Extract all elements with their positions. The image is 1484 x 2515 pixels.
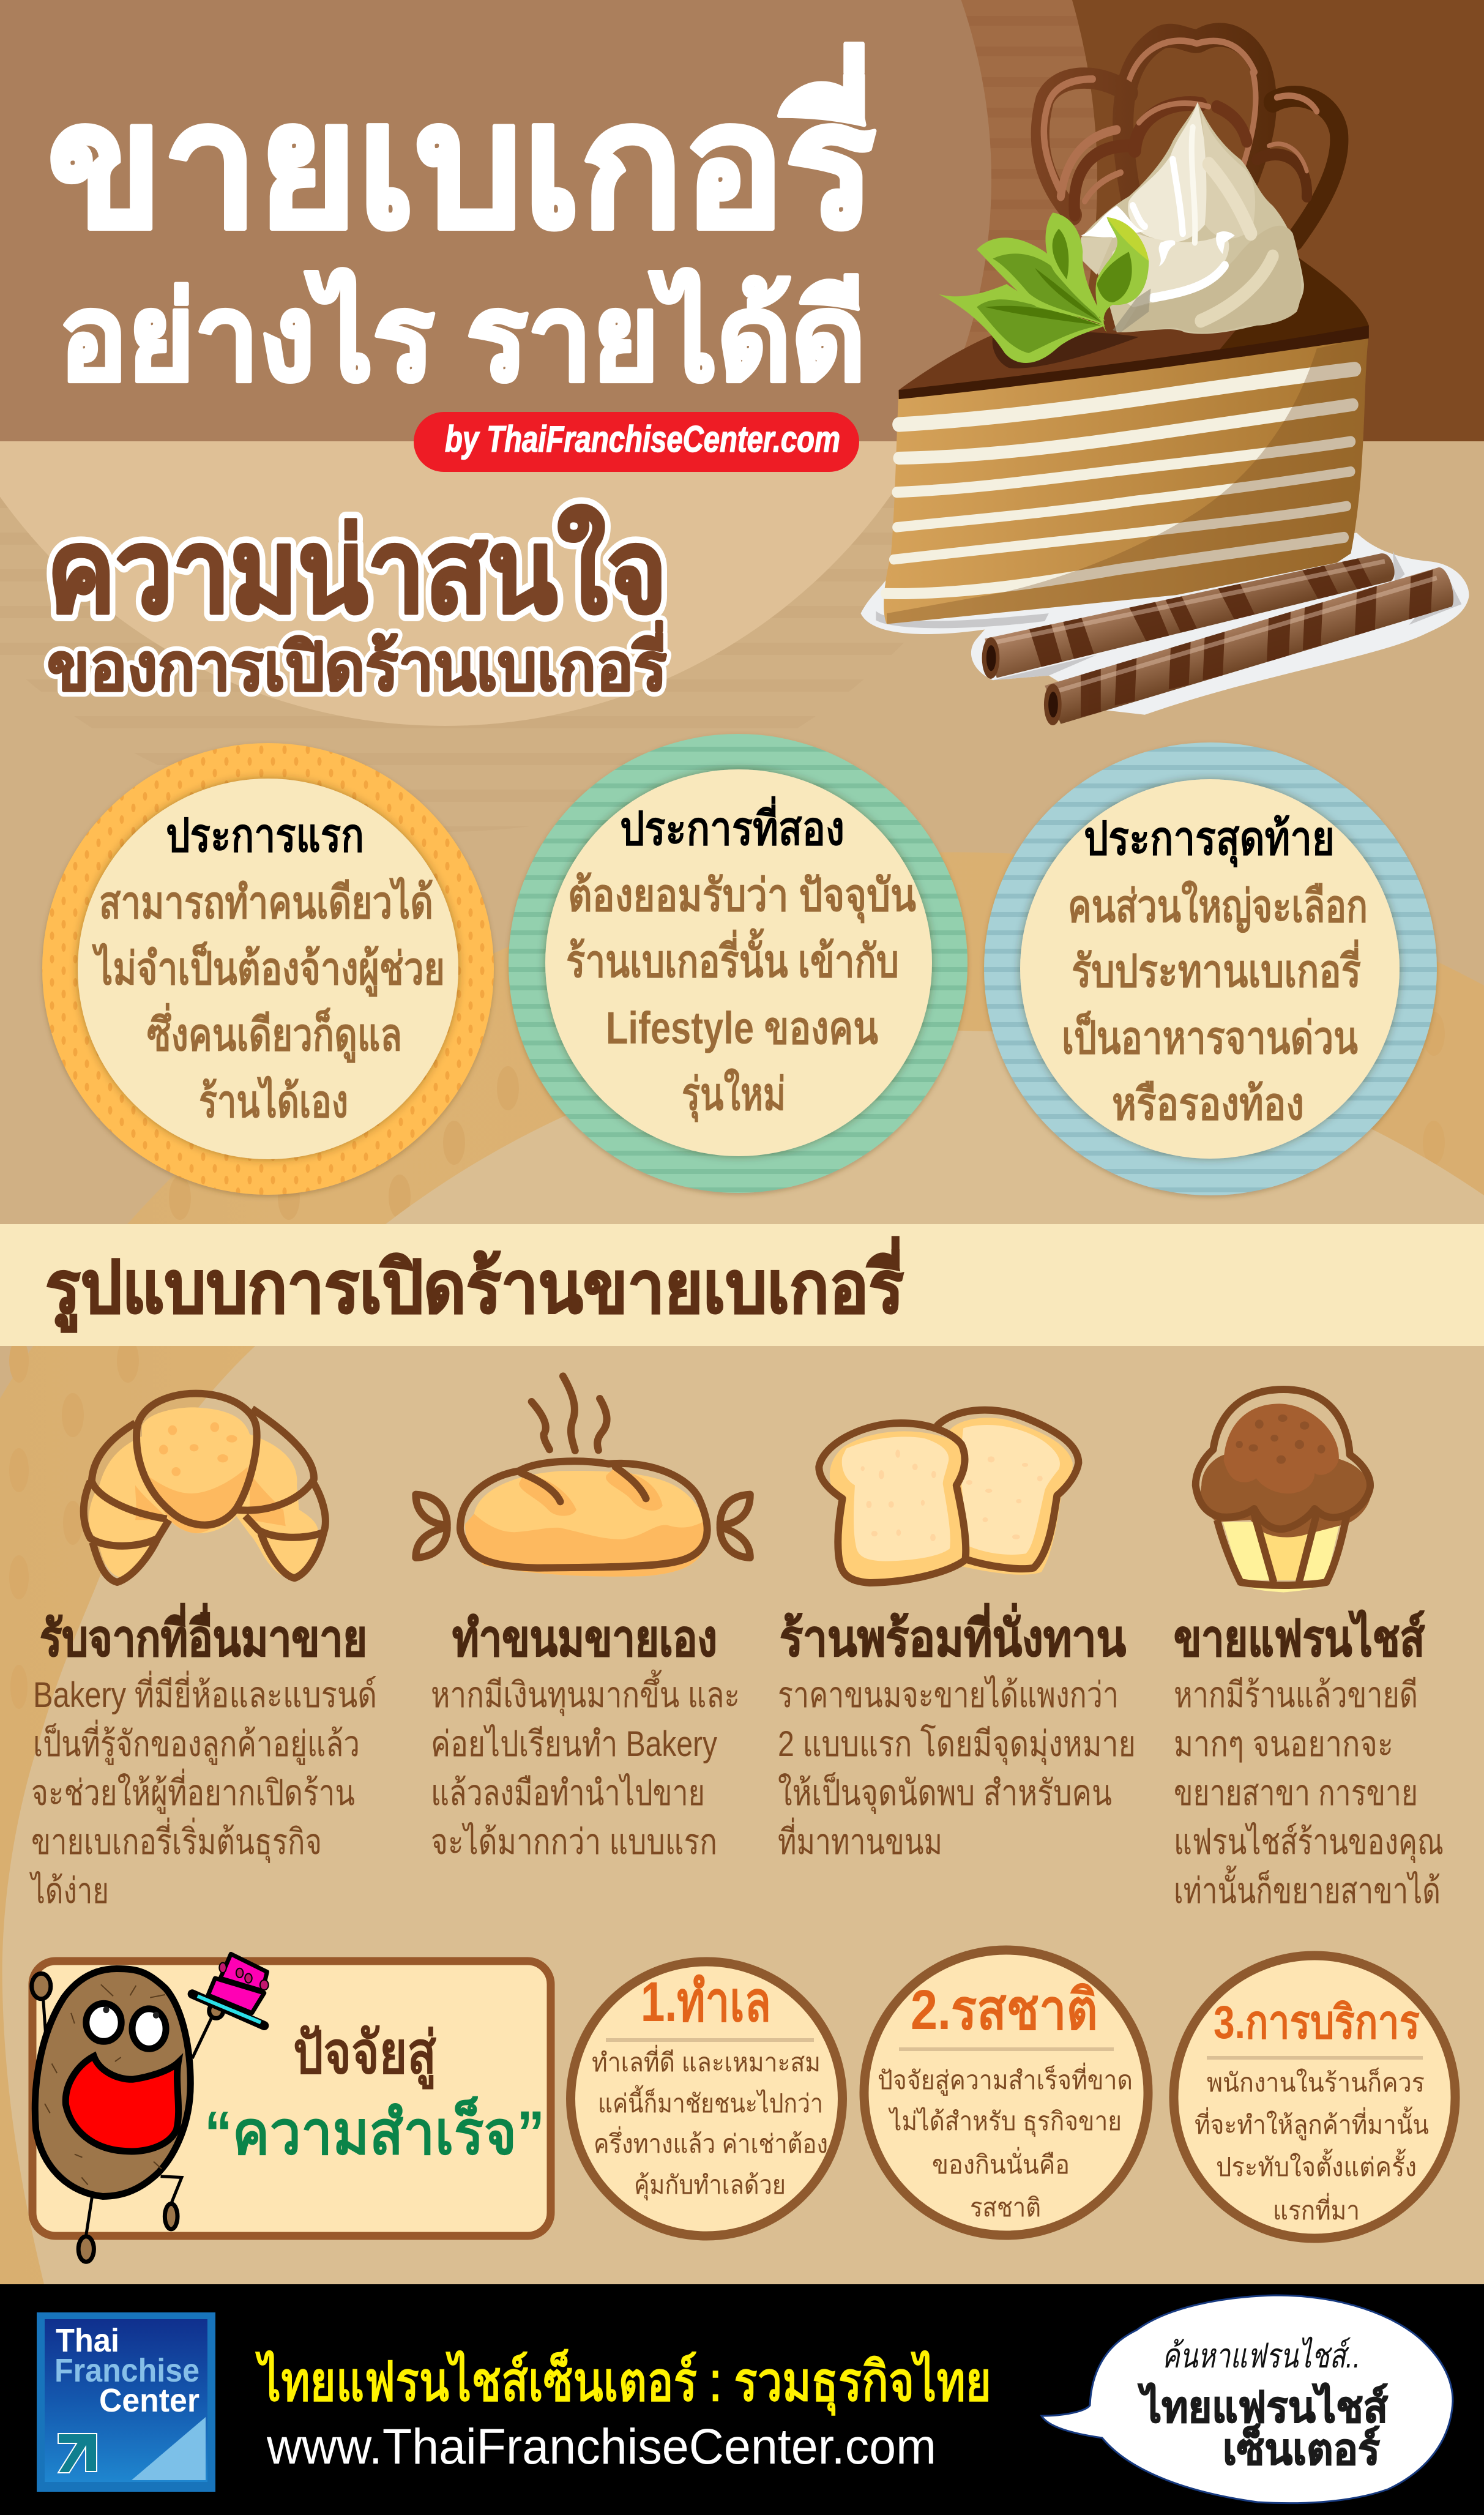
panel: factor 2 taste: [864, 1950, 1148, 2235]
panel: first reason: ซึ่งคนเดียวก็ดูแล: [147, 1003, 402, 1063]
title: [47, 43, 876, 405]
icon: chocolate cupcake: [1196, 1389, 1371, 1593]
logo: Thai Franchise Center: Franchise: [54, 2352, 199, 2389]
icon: baked bread with steam: [416, 1376, 750, 1577]
red byline pill: by ThaiFranchiseCenter.com: [445, 419, 840, 460]
column: buy and resell: รับจากที่อื่นมาขาย: [40, 1603, 367, 1667]
logo: Thai Franchise Center: [37, 2312, 215, 2492]
column: shop with seating: [778, 1603, 1136, 1862]
column: shop with seating: ที่มาทานขนม: [778, 1817, 942, 1862]
logo: Thai Franchise Center: Center: [99, 2382, 199, 2419]
panel: factor 2 taste: ไม่ได้สำหรับ ธุรกิจขาย: [888, 2107, 1122, 2137]
icon: logo arrow: [58, 2434, 97, 2473]
footer website address: www.ThaiFranchiseCenter.com: [266, 2419, 936, 2475]
title: ขายเบเกอรี่: [47, 43, 876, 263]
panel: factor 1 location: ครึ่งทางแล้ว ค่าเช่าต้อง: [594, 2126, 828, 2158]
heading: appeal of opening a bakery: ความน่าสนใจ: [47, 505, 667, 637]
column: franchise: [1174, 1610, 1444, 1911]
cream layers: [886, 369, 1355, 594]
red byline pill: [414, 412, 859, 472]
panel: factor 2 taste: 2.รสชาติ: [911, 1979, 1098, 2041]
panel: success factors box: [32, 1961, 551, 2236]
wafer roll openings: [982, 637, 999, 679]
panel: factor 1 location: [570, 1962, 842, 2236]
panel: factor 2 taste: ปัจจัยสู่ความสำเร็จที่ขาด: [878, 2063, 1133, 2096]
panel: final reason: คนส่วนใหญ่จะเลือก: [1068, 880, 1368, 933]
column: bake your own: ค่อยไปเรียนทำ Bakery: [431, 1724, 717, 1764]
footer slogan: ไทยแฟรนไชส์เซ็นเตอร์ : รวมธุรกิจไทย: [256, 2349, 991, 2415]
panel: first reason: ร้านได้เอง: [199, 1075, 348, 1127]
speech bubble: ไทยแฟรนไชส์: [1137, 2382, 1388, 2431]
panel: second reason: ร้านเบเกอรี่นั้น เข้ากับ: [566, 928, 899, 987]
panel: factor 3 service: แรกที่มา: [1273, 2193, 1360, 2225]
column: bake your own: หากมีเงินทุนมากขึ้น และ: [431, 1670, 740, 1717]
panel: first reason: สามารถทำคนเดียวได้: [99, 876, 433, 928]
panel: factor 3 service: 3.การบริการ: [1214, 1997, 1420, 2049]
column: shop with seating: ราคาขนมจะขายได้แพงกว่า: [778, 1675, 1119, 1715]
heading: appeal of opening a bakery: ของการเปิดร้านเบเกอรี่: [47, 621, 667, 704]
heading: appeal of opening a bakery: ของการเปิดร้านเบเกอรี่: [47, 621, 667, 704]
panel: factor 3 service: ประทับใจตั้งแต่ครั้ง: [1216, 2148, 1417, 2181]
icon: potato mascot holding cake: [32, 1954, 269, 2262]
column: franchise: หากมีร้านแล้วขายดี: [1174, 1675, 1418, 1715]
column: buy and resell: จะช่วยให้ผู้ที่อยากเปิดร้าน: [31, 1768, 355, 1814]
panel: final reason: หรือรองท้อง: [1112, 1078, 1304, 1129]
column: buy and resell: ได้ง่าย: [29, 1870, 109, 1911]
column: shop with seating: ร้านพร้อมที่นั่งทาน: [780, 1603, 1126, 1667]
panel: final reason: เป็นอาหารจานด่วน: [1062, 1011, 1358, 1063]
shaded side: [887, 337, 1369, 624]
whipped cream: [1081, 102, 1304, 334]
column: buy and resell: ขายเบเกอรี่เริ่มต้นธุรกิจ: [31, 1817, 322, 1864]
panel: second reason: รุ่นใหม่: [682, 1067, 786, 1123]
panel: factor 1 location: 1.ทำเล: [641, 1971, 771, 2033]
section banner: bakery formats: [0, 1224, 1484, 1346]
panel: final reason: ประการสุดท้าย: [1084, 813, 1335, 868]
speech bubble: [1042, 2295, 1453, 2503]
chocolate hearts: [1040, 35, 1339, 241]
panel: factor 3 service: [1174, 1956, 1455, 2238]
panel: second reason: [509, 734, 968, 1193]
icon: sliced toast: [819, 1410, 1078, 1583]
column: franchise: ขยายสาขา การขาย: [1174, 1773, 1418, 1813]
panel: factor 2 taste: ของกินนั่นคือ: [932, 2147, 1070, 2179]
panel: first reason: ไม่จำเป็นต้องจ้างผู้ช่วย: [91, 942, 445, 997]
title: อย่างไร รายได้ดี: [59, 268, 866, 405]
illustration: layered chocolate cake: [861, 35, 1469, 731]
column: franchise: มากๆ จนอยากจะ: [1174, 1724, 1393, 1764]
panel: success factors box: ปัจจัยสู่: [293, 2020, 436, 2090]
panel: factor 1 location: คุ้มกับทำเลด้วย: [634, 2170, 786, 2201]
section banner: bakery formats: รูปแบบการเปิดร้านขายเบเกอรี่: [45, 1237, 904, 1332]
panel: second reason: ต้องยอมรับว่า ปัจจุบัน: [568, 870, 916, 924]
column: buy and resell: เป็นที่รู้จักของลูกค้าอยู่แล้ว: [33, 1719, 360, 1765]
panel: final reason: [984, 742, 1437, 1195]
panel: first reason: ประการแรก: [166, 810, 364, 862]
column: franchise: ขายแฟรนไชส์: [1174, 1610, 1425, 1667]
column: bake your own: ทำขนมขายเอง: [452, 1611, 717, 1667]
cake on plate: [192, 1954, 269, 2025]
heading: appeal of opening a bakery: ความน่าสนใจ: [47, 505, 667, 637]
panel: factor 1 location: ทำเลที่ดี และเหมาะสม: [592, 2045, 821, 2077]
column: bake your own: แล้วลงมือทำนำไปขาย: [431, 1773, 705, 1813]
chocolate top: [899, 256, 1369, 398]
logo: Thai Franchise Center: Thai: [56, 2322, 119, 2359]
panel: factor 1 location: แค่นี้ก็มาชัยชนะไปกว่า: [598, 2085, 823, 2118]
wafer roll back: [985, 553, 1395, 678]
panel: success factors box: “ความสำเร็จ”: [204, 2096, 545, 2167]
panel: final reason: รับประทานเบเกอรี่: [1072, 939, 1361, 996]
speech bubble: เซ็นเตอร์: [1223, 2423, 1380, 2473]
footer band: [0, 2284, 1484, 2515]
column: shop with seating: 2 แบบแรก โดยมีจุดมุ่งหมาย: [778, 1724, 1136, 1766]
column: bake your own: [431, 1611, 740, 1862]
column: shop with seating: ให้เป็นจุดนัดพบ สำหรับคน: [778, 1772, 1112, 1815]
heading: appeal of opening a bakery: [47, 505, 667, 704]
icon: croissant: [84, 1394, 326, 1582]
plate shadows: [876, 551, 1461, 680]
background: orange bread ring: [0, 852, 1484, 2284]
panel: factor 2 taste: รสชาติ: [970, 2193, 1041, 2222]
panel: first reason: [42, 743, 494, 1195]
background: page base colours: [0, 0, 1484, 726]
wafer roll front: [1045, 567, 1453, 724]
panel: second reason: Lifestyle ของคน: [606, 1003, 878, 1053]
column: buy and resell: [29, 1603, 377, 1911]
panel: second reason: ประการที่สอง: [620, 796, 845, 855]
column: bake your own: จะได้มากกว่า แบบแรก: [431, 1822, 717, 1862]
panel: factor 3 service: ที่จะทำให้ลูกค้าที่มานั้น: [1195, 2106, 1429, 2140]
speech bubble: ค้นหาแฟรนไชส์..: [1162, 2336, 1360, 2375]
column: buy and resell: Bakery ที่มียี่ห้อและแบรนด์: [33, 1670, 377, 1715]
panel: factor 3 service: พนักงานในร้านก็ควร: [1207, 2068, 1425, 2097]
cake body: [884, 335, 1369, 624]
mint leaves: [939, 212, 1149, 363]
plate: [861, 533, 1469, 715]
